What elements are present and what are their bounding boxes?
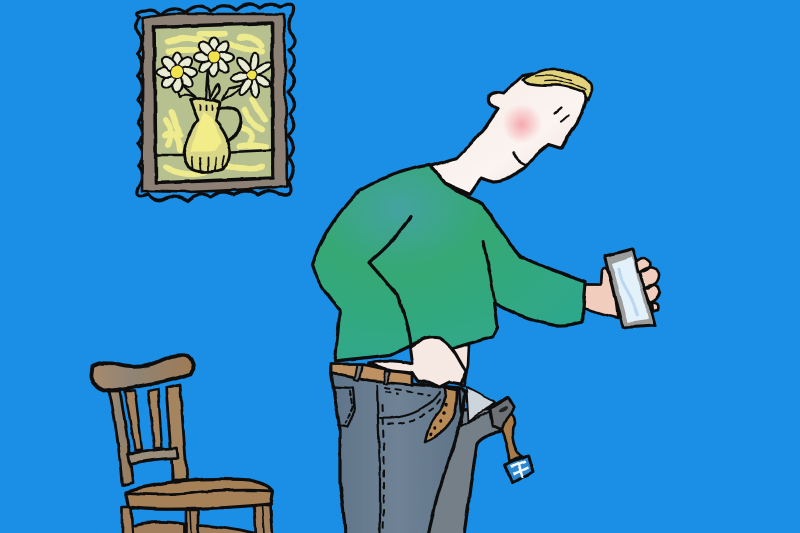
eyes bbox=[554, 107, 569, 122]
phone hand bbox=[582, 249, 660, 327]
smile bbox=[514, 153, 527, 165]
man bbox=[312, 69, 660, 533]
belt end with buckle bbox=[502, 414, 533, 483]
hair bbox=[523, 69, 592, 100]
left arm crease bbox=[369, 216, 411, 345]
waistband lining bbox=[466, 387, 495, 422]
belly skin bbox=[448, 345, 469, 386]
green sweater bbox=[312, 165, 585, 361]
vase bbox=[184, 98, 241, 172]
stems and leaves bbox=[177, 72, 246, 100]
side seam bbox=[377, 386, 380, 533]
neck and head bbox=[430, 69, 592, 194]
phone bbox=[605, 249, 655, 327]
hanging belt tongue bbox=[425, 388, 457, 442]
front of jeans bbox=[331, 373, 465, 533]
back waist of jeans bbox=[425, 387, 514, 533]
lower stretchers bbox=[132, 522, 254, 533]
sleeve crease bbox=[483, 242, 495, 303]
frame moulding bbox=[142, 14, 287, 192]
front pocket bbox=[380, 392, 440, 418]
yellow brush strokes bbox=[165, 34, 266, 174]
cheek blush bbox=[502, 104, 542, 144]
flower centre bbox=[194, 37, 234, 77]
table edge bbox=[156, 150, 272, 155]
fly seam bbox=[459, 388, 462, 425]
seat bbox=[126, 479, 273, 509]
left back post bbox=[109, 391, 133, 485]
seat edge line bbox=[127, 490, 272, 494]
chair bbox=[91, 355, 273, 533]
flower left bbox=[157, 52, 197, 92]
top rail bbox=[91, 355, 193, 391]
framed painting bbox=[136, 4, 295, 201]
scalloped outline bbox=[136, 4, 295, 201]
front legs bbox=[122, 505, 272, 533]
fingers bbox=[636, 258, 660, 312]
right back post bbox=[166, 385, 187, 480]
gripping hand bbox=[368, 337, 466, 387]
belt on waist bbox=[331, 364, 412, 385]
spindles bbox=[125, 389, 162, 450]
back pocket bbox=[333, 387, 355, 427]
canvas bbox=[154, 23, 273, 183]
back cross rail bbox=[128, 448, 178, 464]
nose lip bbox=[548, 144, 560, 148]
flower right bbox=[230, 53, 273, 98]
